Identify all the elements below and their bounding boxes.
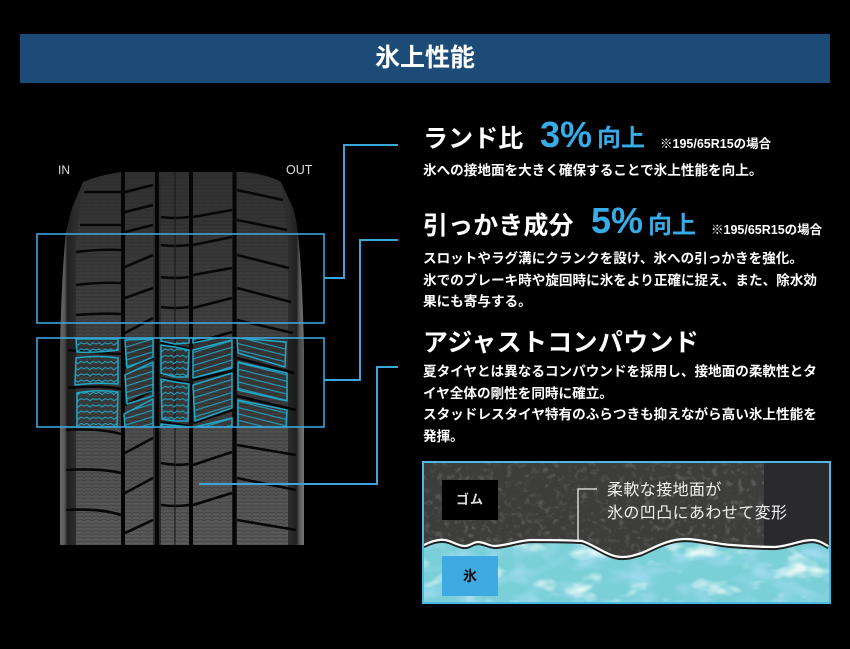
stat suffix: improvement: 向上 <box>648 212 696 239</box>
text: scratch component description: 果にも寄与する。 <box>423 294 532 309</box>
text: adjust compound description: イヤ全体の剛性を同時に確立。 <box>423 386 613 401</box>
title banner <box>20 34 830 83</box>
circumferential grooves <box>123 172 234 545</box>
text: scratch component description: 氷でのブレーキ時や旋回時に氷をより正確に捉え、また、除水効 <box>423 273 817 288</box>
label: rubber <box>442 480 498 520</box>
label: IN: IN <box>58 163 70 177</box>
highlighted blocks with sipes <box>75 338 287 427</box>
tire tread illustration <box>36 144 398 545</box>
heading: scratch component: 引っかき成分 <box>423 212 574 240</box>
label: OUT: OUT <box>286 163 312 177</box>
text: adjust compound description: 夏タイヤとは異なるコンパウンドを採用し、接地面の柔軟性とタ <box>423 364 817 379</box>
rubber layer <box>423 463 830 563</box>
footnote: land ratio: ※195/65R15の場合 <box>660 137 771 151</box>
text: scratch component description <box>423 251 817 309</box>
panel border <box>423 462 830 603</box>
label: ice <box>442 556 498 596</box>
contact line between rubber and ice <box>424 539 828 559</box>
text: land ratio description: 氷への接地面を大きく確保することで氷上性能を向上。 <box>423 163 762 178</box>
lateral grooves <box>66 185 296 533</box>
ice layer <box>424 540 829 602</box>
text: adjust compound description <box>423 364 817 444</box>
callout leader <box>578 489 597 540</box>
connector: scratch component <box>324 240 398 380</box>
connector: land ratio <box>324 145 398 278</box>
darkened highlighted band <box>60 338 304 427</box>
shoulder <box>60 170 304 545</box>
callout text: 氷の凹凸にあわせて変形 <box>607 504 787 522</box>
callout text: 柔軟な接地面が <box>607 482 722 499</box>
text: adjust compound description: 発揮。 <box>423 429 464 444</box>
heading: land ratio: ランド比 <box>423 125 523 153</box>
title banner: 氷上性能 <box>375 44 475 72</box>
stat suffix: improvement: 向上 <box>597 125 645 152</box>
stat: 3%: 3% <box>540 114 592 155</box>
label: rubber: ゴム <box>456 492 484 507</box>
text: adjust compound description: スタッドレスタイヤ特有のふらつきも抑えながら高い氷上性能を <box>423 407 817 422</box>
footnote: scratch component: ※195/65R15の場合 <box>711 223 822 237</box>
panel: rubber and ice diagram <box>422 461 831 604</box>
stat: 5%: 5% <box>591 200 643 241</box>
ribs <box>76 172 121 545</box>
heading: adjust compound: アジャストコンパウンド <box>423 329 699 357</box>
connector: adjust compound <box>199 367 398 484</box>
label: ice: 氷 <box>463 568 477 584</box>
callout text <box>607 481 787 522</box>
highlight box: scratch component <box>37 338 324 427</box>
highlight box: land ratio <box>37 234 324 323</box>
text: scratch component description: スロットやラグ溝にクランクを設け、氷への引っかきを強化。 <box>423 251 803 266</box>
